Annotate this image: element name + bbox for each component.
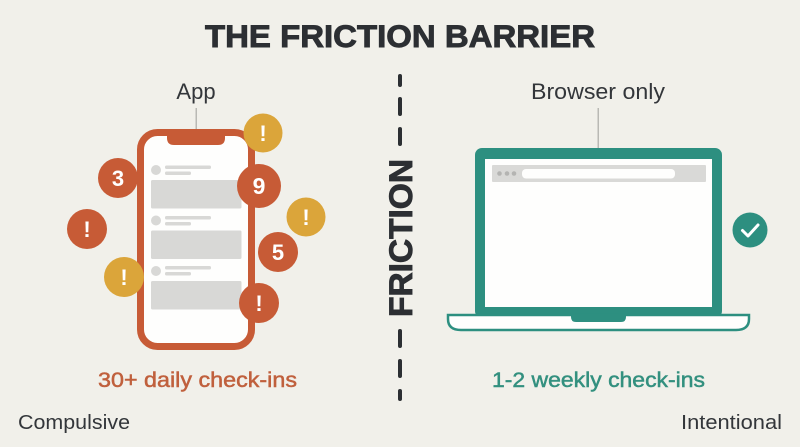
badge: 9: 9 (253, 173, 265, 199)
badge: 3: 3 (112, 166, 124, 191)
panel: browser side (448, 79, 768, 392)
icon: check badge (732, 212, 768, 248)
badge: 5 (258, 232, 298, 272)
connector line: Browser only (598, 108, 599, 149)
title: THE FRICTION BARRIER (205, 18, 595, 54)
dashes above label (398, 76, 402, 144)
connector line: App (196, 108, 197, 130)
feed item 1 (151, 165, 242, 208)
browser bar (492, 165, 706, 182)
badge: yellow alert left (104, 257, 144, 297)
badge: yellow alert left: ! (120, 265, 128, 290)
stat: daily check-ins: 30+ daily check-ins (98, 369, 297, 392)
dashes below label (398, 331, 402, 399)
badge: yellow alert top right (244, 114, 282, 152)
badge: red alert bottom right: ! (255, 291, 263, 316)
feed item 2 (151, 216, 242, 259)
badge: red alert far left (67, 209, 107, 249)
icon: laptop (448, 148, 749, 330)
laptop base (448, 315, 749, 330)
badge: yellow alert right (286, 198, 326, 236)
badge: 3 (98, 158, 138, 198)
badge: red alert bottom right (239, 283, 279, 323)
stat: weekly check-ins: 1-2 weekly check-ins (492, 369, 705, 392)
label: Intentional: Intentional (681, 412, 782, 434)
badge: red alert far left: ! (83, 217, 91, 242)
vertical label: FRICTION: FRICTION (383, 159, 419, 317)
panel: app side (67, 79, 326, 392)
feed item 3 (151, 266, 242, 310)
label: Compulsive: Compulsive (18, 412, 130, 434)
badge: yellow alert top right: ! (259, 121, 267, 146)
badge: 5: 5 (272, 240, 284, 265)
label: App: App (176, 79, 216, 104)
badge: yellow alert right: ! (302, 205, 310, 230)
label: Browser only: Browser only (531, 79, 665, 104)
badge: 9 (237, 164, 281, 208)
icon: phone (140, 132, 252, 346)
